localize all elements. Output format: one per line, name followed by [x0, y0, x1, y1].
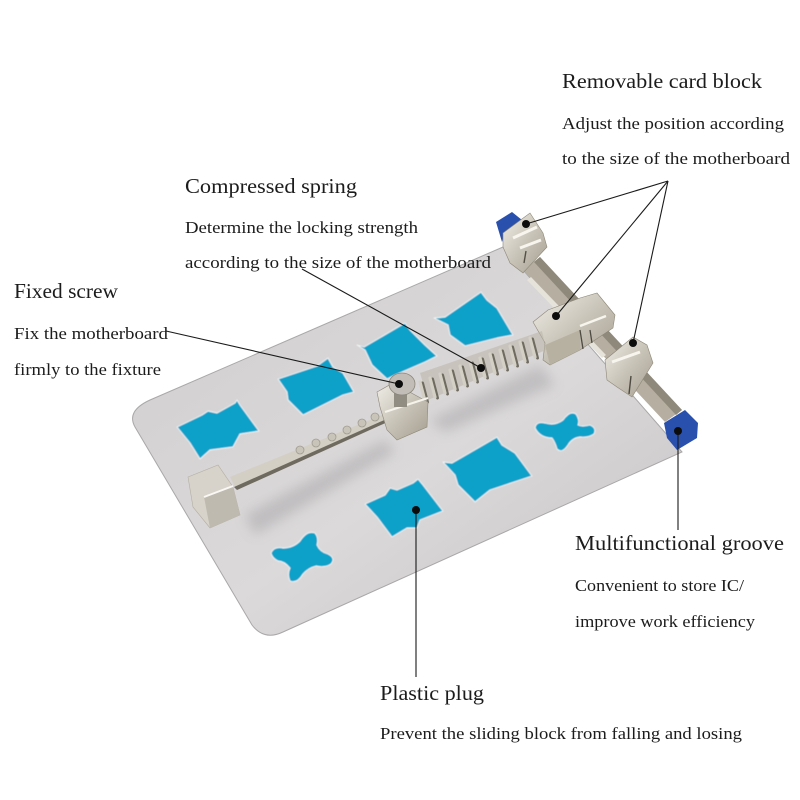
description: compressed spring: according to the size of the motherboard — [185, 253, 492, 272]
end block of stem — [188, 465, 240, 528]
leader line to groove — [674, 427, 682, 530]
lower card block — [605, 337, 653, 397]
description: compressed spring — [185, 218, 492, 272]
description: compressed spring: Determine the locking strength — [185, 218, 419, 237]
middle card block — [533, 293, 615, 365]
leader line to spring — [302, 269, 485, 372]
description: fixed screw — [14, 324, 169, 379]
metal base plate — [133, 247, 682, 635]
heading: multifunctional groove: Multifunctional groove — [575, 531, 784, 555]
description: fixed screw: Fix the motherboard — [14, 324, 169, 343]
shadow under stem and spring — [245, 365, 555, 535]
slotted rail — [523, 257, 682, 422]
top card block — [503, 213, 547, 273]
description: removable card block: Adjust the position according — [562, 114, 785, 133]
sliding stem with dimples — [230, 413, 392, 490]
heading: compressed spring: Compressed spring — [185, 174, 358, 198]
plastic plug: bottom blue cap — [664, 410, 698, 450]
callout: removable card block — [522, 69, 791, 347]
fixed screw head — [389, 373, 415, 407]
description: removable card block: to the size of the motherboard — [562, 149, 791, 168]
description: removable card block — [562, 114, 791, 168]
callout: fixed screw — [14, 279, 403, 388]
callout: multifunctional groove — [575, 427, 784, 631]
description: multifunctional groove — [575, 576, 756, 631]
plastic plug: top blue cap — [496, 212, 522, 242]
description: fixed screw: firmly to the fixture — [14, 360, 161, 379]
blue cut-out holes — [177, 292, 595, 582]
callout: compressed spring — [185, 174, 492, 372]
heading: fixed screw: Fixed screw — [14, 279, 119, 303]
description: plastic plug: Prevent the sliding block from falling and losing — [380, 724, 743, 743]
callout: plastic plug — [380, 506, 743, 743]
description: multifunctional groove: improve work efficiency — [575, 612, 756, 631]
leader line to hole — [412, 506, 420, 677]
heading: removable card block: Removable card block — [562, 69, 763, 93]
heading: plastic plug: Plastic plug — [380, 681, 485, 705]
leader line to screw — [166, 331, 403, 388]
slider block — [377, 383, 428, 440]
leader lines to card blocks — [522, 181, 668, 347]
description: multifunctional groove: Convenient to store IC/ — [575, 576, 744, 595]
product: soldering fixture plate — [133, 212, 698, 635]
compression spring — [420, 331, 546, 402]
